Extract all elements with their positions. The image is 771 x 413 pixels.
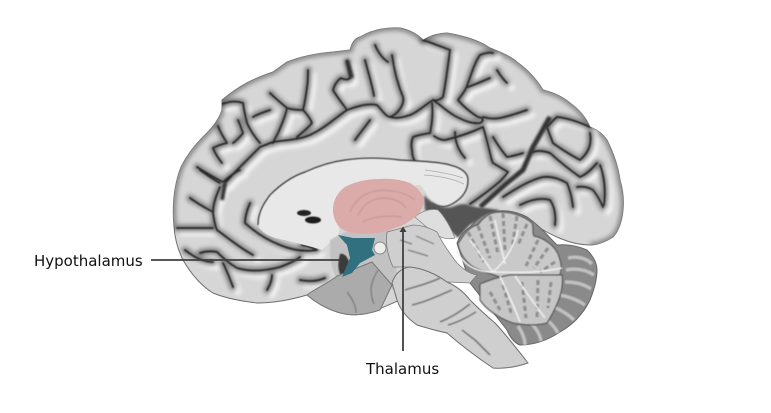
diencephalon grey area: [330, 230, 400, 290]
deep cleft shadow: [480, 117, 550, 207]
arbor vitae white branches: [456, 220, 562, 322]
lower lobe: [480, 275, 562, 325]
brain illustration: [173, 28, 623, 368]
Hypothalamus leader line: [151, 259, 341, 261]
white matter and corpus callosum: [258, 158, 468, 250]
cerebellum: [456, 211, 597, 345]
cerebrum: [173, 28, 623, 315]
dark space under splenium: [424, 195, 500, 238]
label: Hypothalamus: Hypothalamus: [34, 252, 143, 270]
Thalamus leader arrow: [400, 226, 406, 351]
thalamus highlight: [333, 179, 424, 234]
label: Thalamus: Thalamus: [365, 360, 439, 378]
dark spots: [297, 210, 311, 216]
hypothalamus highlight: [338, 235, 375, 277]
upper lobe: [458, 212, 561, 278]
medial temporal lobe: [307, 262, 392, 315]
mammillary body: [374, 242, 386, 254]
rim shading: [173, 28, 623, 245]
striped outer folia: [518, 257, 594, 345]
midbrain and colliculi: [386, 209, 477, 283]
folia lines: [468, 213, 555, 318]
pons and medulla: [392, 267, 528, 368]
